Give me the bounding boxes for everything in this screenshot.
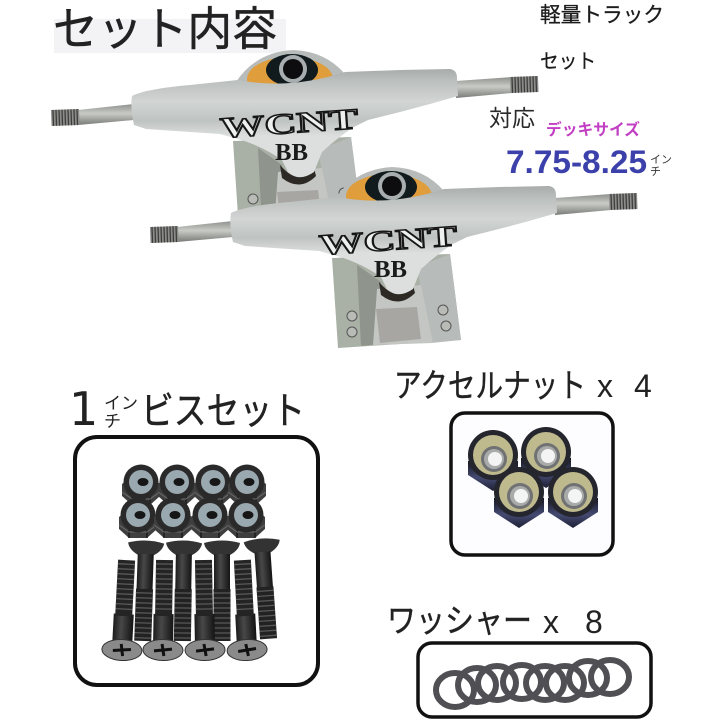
panel: washers bbox=[418, 643, 651, 717]
panel: screw set bbox=[75, 437, 318, 685]
text block: lightweight truck set: 軽量トラック bbox=[540, 4, 664, 27]
heading: axle nuts x 4: アクセルナット bbox=[394, 367, 586, 404]
heading: axle nuts x 4: x bbox=[597, 368, 613, 404]
product image: pair of silver trucks bbox=[51, 50, 638, 348]
text block: lightweight truck set: セット bbox=[540, 51, 596, 73]
panel: axle nuts bbox=[451, 413, 613, 555]
heading: washers x 8: x bbox=[543, 604, 559, 640]
heading: 1 inch screw set bbox=[69, 382, 305, 436]
text block: compatible deck size: 対応 bbox=[489, 105, 535, 131]
mounting screws, 8 pieces bbox=[101, 537, 287, 662]
text block: compatible deck size: 7.75-8.25 bbox=[506, 144, 647, 180]
washers, 8 pieces bbox=[436, 660, 629, 707]
heading: axle nuts x 4: 4 bbox=[634, 368, 652, 404]
heading: washers x 8: 8 bbox=[585, 604, 603, 640]
text block: compatible deck size: イン bbox=[650, 154, 672, 166]
axle nuts, 4 pieces bbox=[468, 427, 598, 528]
heading: washers x 8: ワッシャー bbox=[387, 602, 532, 639]
text block: compatible deck size: デッキサイズ bbox=[546, 120, 640, 139]
mounting nuts, 8 pieces bbox=[119, 464, 266, 538]
text block: compatible deck size: チ bbox=[650, 165, 661, 178]
heading: 1 inch screw set: 1 bbox=[69, 382, 98, 436]
heading: 1 inch screw set: チ bbox=[104, 412, 121, 431]
heading: 1 inch screw set: ビスセット bbox=[141, 391, 305, 433]
text block: compatible deck size bbox=[489, 105, 672, 180]
title: set contents: セット内容 bbox=[53, 3, 277, 55]
text block: lightweight truck set bbox=[540, 4, 664, 73]
heading: 1 inch screw set: イン bbox=[104, 394, 138, 413]
